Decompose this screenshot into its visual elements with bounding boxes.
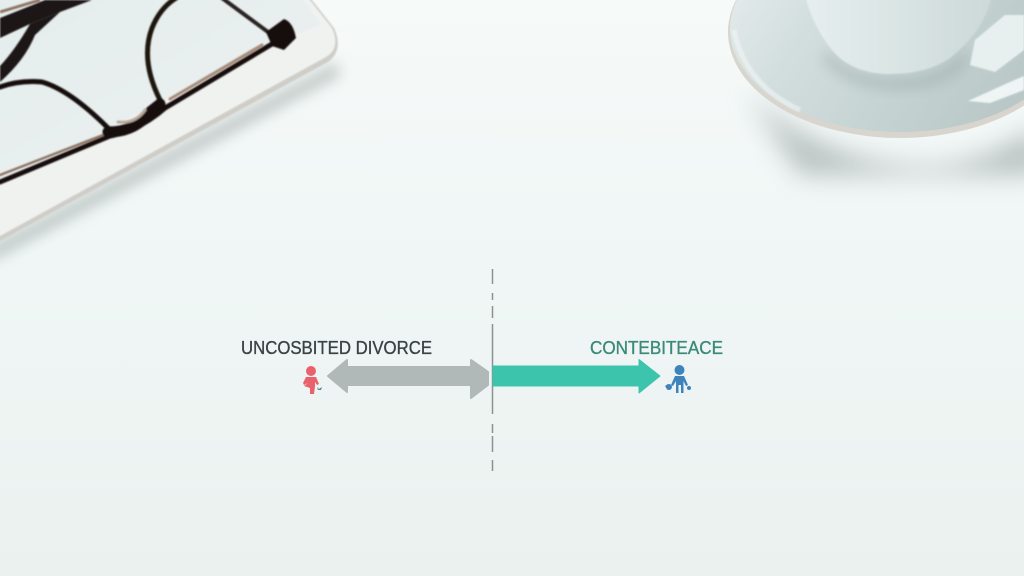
icon: cup [805,0,992,74]
grey double arrow [328,360,488,398]
icon: red person [303,366,322,394]
icon: blue person [665,365,691,393]
teal arrow [493,360,660,393]
tablet with glasses [0,0,340,262]
coffee cup and saucer [728,0,1024,175]
label: contebiteace: CONTEBITEACE [590,337,723,358]
divider: dashed centre line [492,269,494,471]
label: uncosbited divorce: UNCOSBITED DIVORCE [241,337,432,358]
icon: glasses [0,0,296,182]
